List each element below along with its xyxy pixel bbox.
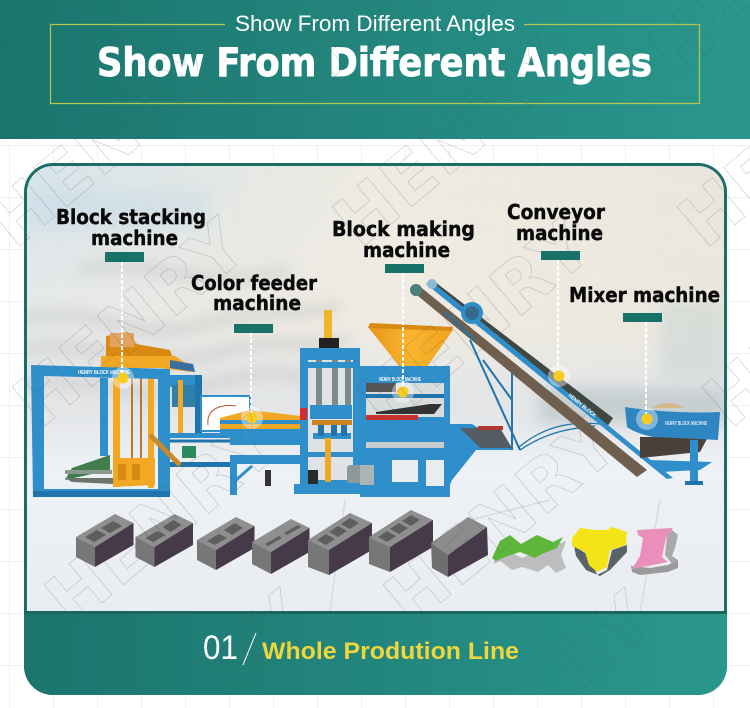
main panel xyxy=(20,163,727,695)
side feed chute xyxy=(450,423,600,485)
label: mixer machine xyxy=(569,283,720,322)
red switch xyxy=(300,408,307,420)
hollow concrete blocks row xyxy=(76,510,678,577)
motor xyxy=(347,465,360,483)
label: block stacking machine xyxy=(56,205,206,262)
machine: block making machine xyxy=(294,310,453,497)
block 4 xyxy=(252,519,310,574)
footer band xyxy=(24,611,727,695)
HENRY watermarks: HENRY xyxy=(30,401,295,641)
hopper xyxy=(368,327,453,367)
frame logo text: HENRY BLOCK MACHINE xyxy=(78,370,130,376)
label: block making machine xyxy=(332,217,475,273)
leader lines xyxy=(122,260,646,419)
header main title: Show From Different Angles xyxy=(97,41,652,86)
block 5 xyxy=(308,513,372,575)
HENRY watermarks: HENRY xyxy=(0,203,263,443)
right body xyxy=(360,366,450,496)
orange base carriage xyxy=(120,458,155,487)
machine: connecting conveyor and colour feeder xyxy=(150,396,302,495)
header small title: Show From Different Angles xyxy=(235,11,515,36)
green paver xyxy=(492,535,566,573)
machine: pan mixer xyxy=(625,403,720,485)
footer slash xyxy=(243,633,256,665)
label: color feeder machine: machine xyxy=(213,291,301,315)
machine logo text: HENRY BLOCK MACHINE xyxy=(379,377,421,383)
label: conveyor machine xyxy=(507,200,605,260)
orange lifting head xyxy=(101,332,195,372)
header band xyxy=(0,0,750,139)
tower frame xyxy=(294,348,360,494)
label: conveyor machine: Conveyor xyxy=(507,200,605,224)
machine: block stacking machine xyxy=(31,332,202,497)
conveyor logo text: HENRY BLOCK xyxy=(567,393,597,419)
label: mixer machine: Mixer machine xyxy=(569,283,720,307)
label: conveyor machine: machine xyxy=(516,221,603,245)
label: color feeder machine: Color feeder xyxy=(191,271,317,295)
HENRY watermarks: HENRY xyxy=(369,401,634,641)
label: block making machine: Block making xyxy=(332,217,475,241)
header frame xyxy=(50,24,700,104)
photo background xyxy=(20,165,726,612)
label: block making machine: machine xyxy=(363,238,450,262)
label: block stacking machine: machine xyxy=(91,226,178,250)
HENRY watermarks: RY xyxy=(534,575,669,707)
pink paver xyxy=(631,528,678,575)
HENRY watermarks: HENRY xyxy=(318,23,583,263)
white feeder housing xyxy=(201,396,250,431)
feeder body xyxy=(220,410,300,430)
footer number: 01 xyxy=(203,629,238,667)
yellow paver xyxy=(572,527,627,576)
blue front frame xyxy=(31,365,170,497)
block 3 xyxy=(197,517,254,570)
block 1 xyxy=(76,514,134,567)
HENRY watermarks: HENRY xyxy=(343,203,608,443)
mixer logo text: HENRY BLOCK MACHINE xyxy=(665,421,707,427)
label: color feeder machine xyxy=(191,271,317,333)
label: block stacking machine: Block stacking xyxy=(56,205,206,229)
block 2 xyxy=(136,514,193,567)
marker dots xyxy=(112,365,658,430)
curb block xyxy=(431,517,488,577)
stacked blocks pallet xyxy=(65,455,113,484)
HENRY watermarks: RY xyxy=(189,575,324,707)
block 6 xyxy=(369,510,433,572)
footer caption: Whole Prodution Line xyxy=(262,638,519,665)
yellow press cylinder xyxy=(324,310,332,338)
machine: inclined belt conveyor xyxy=(410,279,673,479)
